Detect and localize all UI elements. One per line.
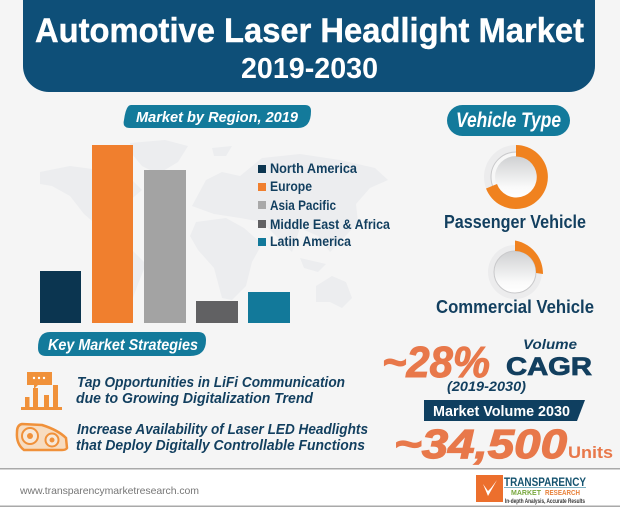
label: passenger vehicle: Passenger Vehicle: [444, 212, 586, 232]
section pill: Market by Region: Market by Region, 2019: [136, 109, 299, 126]
logo: RESEARCH: [545, 488, 580, 497]
strategy text 2: that Deploy Digitally Controllable Functions: [76, 438, 365, 454]
legend: [258, 160, 390, 249]
legend: Europe: [270, 178, 312, 194]
legend: North America: [270, 160, 357, 176]
strategy text 1: [76, 375, 345, 407]
world map background: [40, 140, 388, 316]
logo: In-depth Analysis, Accurate Results: [505, 498, 585, 505]
label: CAGR: CAGR: [506, 353, 592, 381]
donut: passenger vehicle: [484, 145, 548, 209]
section pill: Vehicle Type: [447, 105, 570, 136]
bar chart: [40, 145, 290, 323]
stat: CAGR percent: ~28%: [382, 338, 490, 387]
icon: headlight: [17, 424, 67, 450]
header banner: [23, 0, 595, 92]
donut: commercial vehicle: [488, 240, 543, 299]
label: units: Units: [568, 443, 613, 462]
icon: chart with speech bubble: [21, 372, 62, 410]
strategy text 2: [76, 422, 368, 454]
subtitle years: 2019-2030: [241, 53, 378, 85]
section pill: Key Market Strategies: Key Market Strategies: [48, 337, 198, 354]
label: commercial vehicle: Commercial Vehicle: [436, 296, 594, 317]
legend: Latin America: [270, 233, 351, 249]
section pill: Market by Region: [124, 105, 311, 128]
label: period: (2019-2030): [447, 379, 527, 394]
section pill: Key Market Strategies: [38, 332, 206, 356]
legend: Asia Pacific: [270, 197, 336, 213]
footer: [0, 468, 620, 507]
logo: MARKET: [511, 488, 541, 497]
logo: TRANSPARENCY: [504, 475, 586, 489]
strategy text 1: Tap Opportunities in LiFi Communication: [77, 375, 345, 391]
banner: market volume 2030: Market Volume 2030: [433, 403, 570, 420]
legend: Middle East & Africa: [270, 216, 390, 232]
strategy text 1: due to Growing Digitalization Trend: [76, 391, 314, 407]
strategy text 2: Increase Availability of Laser LED Headlights: [77, 422, 368, 438]
website url: www.transparencymarketresearch.com: [19, 485, 199, 497]
stat: market volume units: ~34,500: [394, 421, 567, 467]
section pill: Vehicle Type: Vehicle Type: [456, 109, 561, 132]
logo: [476, 475, 586, 505]
title: Automotive Laser Headlight Market: [35, 12, 584, 50]
label: volume: Volume: [523, 336, 577, 352]
